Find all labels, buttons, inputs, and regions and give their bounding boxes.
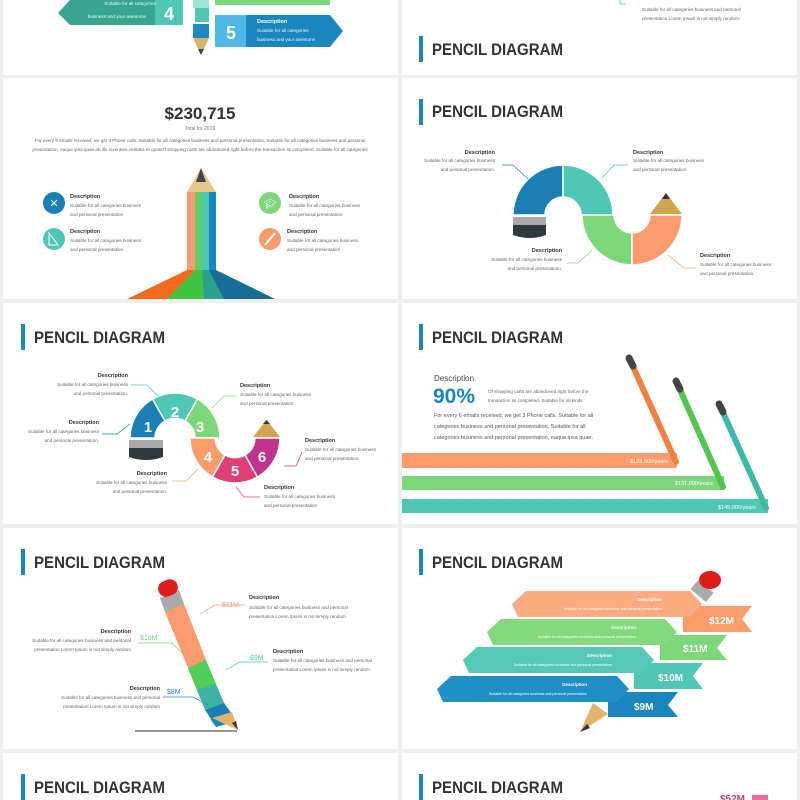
slide 1: arrows fragment xyxy=(58,0,343,55)
slide 7: diagonal pencil: presentation Lorem Ipsum is not simply random xyxy=(63,704,160,709)
slide 7: diagonal pencil: Description xyxy=(101,629,132,635)
slide 5: numbered S curve: 3 xyxy=(196,419,204,436)
slide 4: S curve pencil: Description xyxy=(700,253,731,259)
slide 10 title: PENCIL DIAGRAM xyxy=(432,778,563,797)
callouts: Suitable for all categories business and personal xyxy=(249,605,348,610)
arrow 5 xyxy=(215,15,343,47)
callout: presentation Lorem Ipsum is not simply random. xyxy=(642,16,740,21)
slide 5: numbered S curve: Description xyxy=(264,485,295,491)
text block: transaction its completed. Suitable for all kinds. xyxy=(488,398,584,403)
slide 5: numbered S curve: and personal presentation. xyxy=(45,438,99,443)
ribbons: $10M xyxy=(658,673,683,684)
title: PENCIL DIAGRAM xyxy=(34,328,165,347)
paragraph: presentation, eaque ipsa quae ab illo inventore veritatis et quasOf shopping carts are abandoned right before the transaction its completed. Suitable for all categories xyxy=(32,147,368,152)
slide 7: diagonal pencil: $9M xyxy=(250,655,264,662)
text block: 90% xyxy=(433,385,475,408)
title xyxy=(419,549,563,575)
slide 5: numbered S curve: Suitable for all categories business xyxy=(305,447,377,452)
slide 4: S curve pencil: Description xyxy=(633,150,664,156)
slide 4: S curve pencil: and personal presentation. xyxy=(700,271,754,276)
slide 7: diagonal pencil: presentation Lorem Ipsum is not simply random xyxy=(34,647,131,652)
arrow 4: Suitable for all categories xyxy=(104,1,156,6)
slide 5: numbered S curve: 2 xyxy=(171,404,179,421)
slide 5: numbered S curve: and personal presentation. xyxy=(305,456,359,461)
slide 5: numbered S curve: Description xyxy=(137,471,168,477)
slide 5: numbered S curve: Description xyxy=(305,438,336,444)
pencil with rays xyxy=(127,168,275,299)
pencils xyxy=(629,358,766,508)
bands: $123,000/years xyxy=(630,459,668,465)
callout: Suitable for all categories business and personal xyxy=(642,7,741,12)
text block: Of shopping carts are abandoned right before the xyxy=(488,389,589,394)
slide 3: total pencil: Description xyxy=(70,229,101,235)
diagram xyxy=(513,165,682,265)
items: and personal presentation xyxy=(70,212,124,217)
slide 3: total pencil xyxy=(32,104,368,299)
pencil xyxy=(135,577,238,731)
slide 3: total pencil: Description xyxy=(287,229,318,235)
slide 5: numbered S curve: 4 xyxy=(204,449,213,466)
slide 3: total pencil: and personal presentation xyxy=(289,212,343,217)
slide 7: diagonal pencil: $8M xyxy=(167,689,181,696)
slide 6: 90% with bands xyxy=(402,324,768,513)
callouts: presentation Lorem Ipsum is not simply random xyxy=(249,614,346,619)
callouts xyxy=(424,150,528,179)
slide 3: total pencil: 🎓︎ xyxy=(264,198,277,210)
ribbons: $12M xyxy=(709,616,734,627)
bands xyxy=(402,453,768,513)
callouts: Description xyxy=(249,595,280,601)
paragraph: For every 6 emails received, we get 3 Phone calls. Suitable for all categories business and personal presentation, Suitable for all categories business and personal xyxy=(35,138,365,143)
slide 7: diagonal pencil: Description xyxy=(130,686,161,692)
arrow 4: business and your awesome xyxy=(88,14,147,19)
slide 4: S curve pencil: and personal presentation. xyxy=(633,167,687,172)
title: PENCIL DIAGRAM xyxy=(432,40,563,59)
bands: $145,000/years xyxy=(718,505,756,511)
slide 4: S curve pencil: Suitable for all categories business xyxy=(633,158,705,163)
title: PENCIL DIAGRAM xyxy=(432,553,563,572)
slide 3: total pencil: and personal presentation xyxy=(70,247,124,252)
slide 3: total pencil: Suitable for all categories business xyxy=(289,203,361,208)
slide 8: ribbon pencil xyxy=(419,549,752,732)
heading number: $230,715 xyxy=(165,104,235,123)
callouts: Suitable for all categories business xyxy=(57,382,129,387)
slide 4: S curve pencil: Suitable for all categories business xyxy=(491,257,563,262)
slide 9 title xyxy=(21,774,165,800)
slide 4: S curve pencil: Suitable for all categories business xyxy=(700,262,772,267)
text block xyxy=(433,374,593,441)
callouts xyxy=(57,373,158,396)
slide 5: numbered S curve: 5 xyxy=(231,463,239,480)
ribbons: Description xyxy=(587,653,612,658)
slide 4: S curve pencil: Description xyxy=(532,248,563,254)
arrow 5: Suitable for all categories xyxy=(257,28,309,33)
slide 3: total pencil: Suitable for all categories business xyxy=(70,238,142,243)
slide 5: numbered S curve: Description xyxy=(69,420,100,426)
callout xyxy=(620,0,741,21)
items xyxy=(43,192,142,217)
arrow 4 xyxy=(58,0,183,25)
slide 3: total pencil: and personal presentation xyxy=(287,247,341,252)
title xyxy=(21,549,165,575)
ribbons: Suitable for all categories business and personal presentation xyxy=(538,635,636,639)
bands: $131,000/years xyxy=(675,481,713,487)
green bar top xyxy=(215,0,330,5)
slide 5: numbered S curve: Suitable for all categories business xyxy=(96,480,168,485)
title xyxy=(419,36,563,62)
ribbons: $11M xyxy=(683,644,707,655)
ribbons: Suitable for all categories business and personal presentation xyxy=(489,692,587,696)
slide 5: numbered S curve: and personal presentation. xyxy=(240,401,294,406)
slide 2 fragment xyxy=(419,0,741,62)
slide 7: diagonal pencil xyxy=(21,549,372,731)
slide 3: total pencil: Suitable for all categories business xyxy=(287,238,359,243)
ribbons: Description xyxy=(562,682,587,687)
slide 5: numbered S curve xyxy=(21,324,377,508)
slide 5: numbered S curve: and personal presentation. xyxy=(113,489,167,494)
ribbons: Suitable for all categories business and personal presentation xyxy=(564,607,662,611)
items: ✕ xyxy=(49,198,59,210)
slide 3: total pencil: Total for 2019 xyxy=(185,126,215,132)
slide 5: numbered S curve: 6 xyxy=(258,449,266,466)
slide 5: numbered S curve: 1 xyxy=(144,419,152,436)
ribbons: $9M xyxy=(634,702,653,713)
items: Description xyxy=(70,194,101,200)
ribbons: Description xyxy=(611,625,636,630)
slide 7: diagonal pencil: $10M xyxy=(140,635,158,642)
title: PENCIL DIAGRAM xyxy=(34,553,165,572)
title: PENCIL DIAGRAM xyxy=(432,328,563,347)
diagram xyxy=(130,393,280,483)
slide 4: S curve pencil xyxy=(419,99,772,276)
slide 7: diagonal pencil: Suitable for all categories business and personal xyxy=(273,658,372,663)
slide 7: diagonal pencil: Suitable for all categories business and personal xyxy=(32,638,131,643)
pencil tip and eraser xyxy=(580,571,721,732)
slide 4: S curve pencil: and personal presentation. xyxy=(508,266,562,271)
slide 7: diagonal pencil: presentation Lorem Ipsum is not simply random xyxy=(273,667,370,672)
text block: Description xyxy=(434,374,474,383)
ribbons: Suitable for all categories business and personal presentation xyxy=(514,663,612,667)
callouts: and personal presentation. xyxy=(441,167,495,172)
title xyxy=(419,99,563,125)
slide 9 title: PENCIL DIAGRAM xyxy=(34,778,165,797)
slide 7: diagonal pencil: Description xyxy=(273,649,304,655)
callouts: $11M xyxy=(222,602,239,609)
title xyxy=(419,324,563,350)
arrow 5: Description xyxy=(257,19,288,25)
slide 5: numbered S curve: Description xyxy=(240,383,271,389)
slide 5: numbered S curve: Suitable for all categories business xyxy=(240,392,312,397)
callouts: Suitable for all categories business xyxy=(424,158,496,163)
text block: categories business and personal presentation, Suitable for all xyxy=(434,424,586,430)
ribbons: Description xyxy=(637,597,662,602)
arrow 5: business and your awesome xyxy=(257,37,316,42)
pencil pieces xyxy=(193,0,209,55)
slide 5: numbered S curve: Suitable for all categories business xyxy=(264,494,336,499)
callouts: and personal presentation. xyxy=(74,391,128,396)
slide 3: total pencil: Description xyxy=(289,194,320,200)
arrow 4: 4 xyxy=(164,4,174,24)
text block: For every 6 emails received, we get 3 Phone calls. Suitable for all xyxy=(434,413,593,419)
arrow 5: 5 xyxy=(226,23,236,43)
slide 5: numbered S curve: Suitable for all categories business xyxy=(28,429,100,434)
callouts xyxy=(200,595,348,619)
title xyxy=(21,324,165,350)
slide 7: diagonal pencil: Suitable for all categories business and personal xyxy=(61,695,160,700)
slide 10 title xyxy=(419,774,563,800)
paragraph xyxy=(32,138,368,152)
callouts: Description xyxy=(98,373,129,379)
callouts: Description xyxy=(465,150,496,156)
slide 10 value xyxy=(720,794,768,800)
text block: categories business and personal presentation, eaque ipsa quae. xyxy=(434,435,593,441)
items: Suitable for all categories business xyxy=(70,203,142,208)
ribbons xyxy=(437,591,752,717)
title: PENCIL DIAGRAM xyxy=(432,102,563,121)
slide 5: numbered S curve: and personal presentation. xyxy=(264,503,318,508)
